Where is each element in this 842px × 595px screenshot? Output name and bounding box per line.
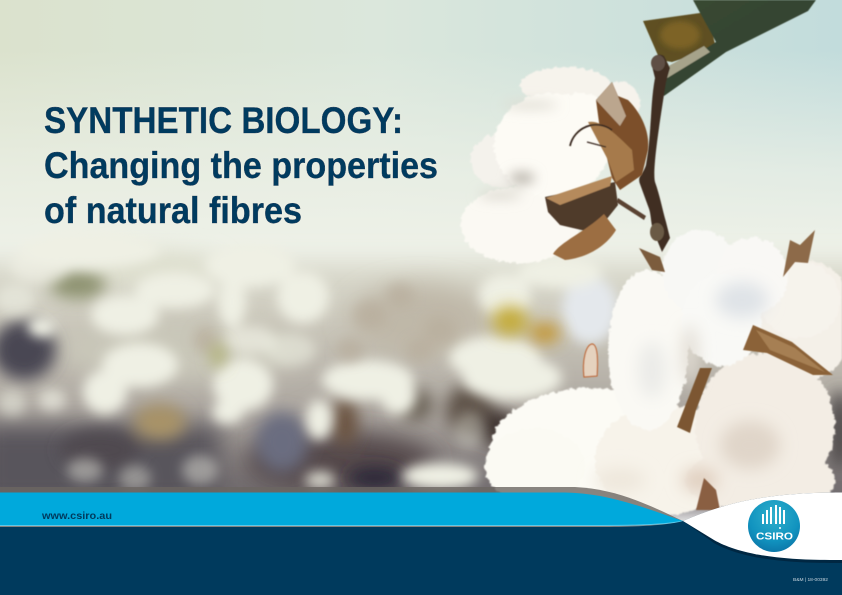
title: of natural fibres (44, 190, 302, 231)
photo: upper cotton boll (460, 67, 648, 263)
photo: lower cotton boll (485, 230, 842, 515)
photo: cotton leaf and stem (616, 0, 816, 252)
website address: www.csiro.au (41, 510, 112, 522)
title: SYNTHETIC BIOLOGY: (44, 100, 403, 141)
CSIRO logo badge (748, 500, 800, 552)
title: Changing the properties (44, 145, 438, 186)
footer band (0, 487, 842, 595)
CSIRO logo badge: CSIRO (756, 532, 793, 542)
title (44, 100, 438, 231)
publication code: B&M | 18-00392 (793, 577, 828, 582)
